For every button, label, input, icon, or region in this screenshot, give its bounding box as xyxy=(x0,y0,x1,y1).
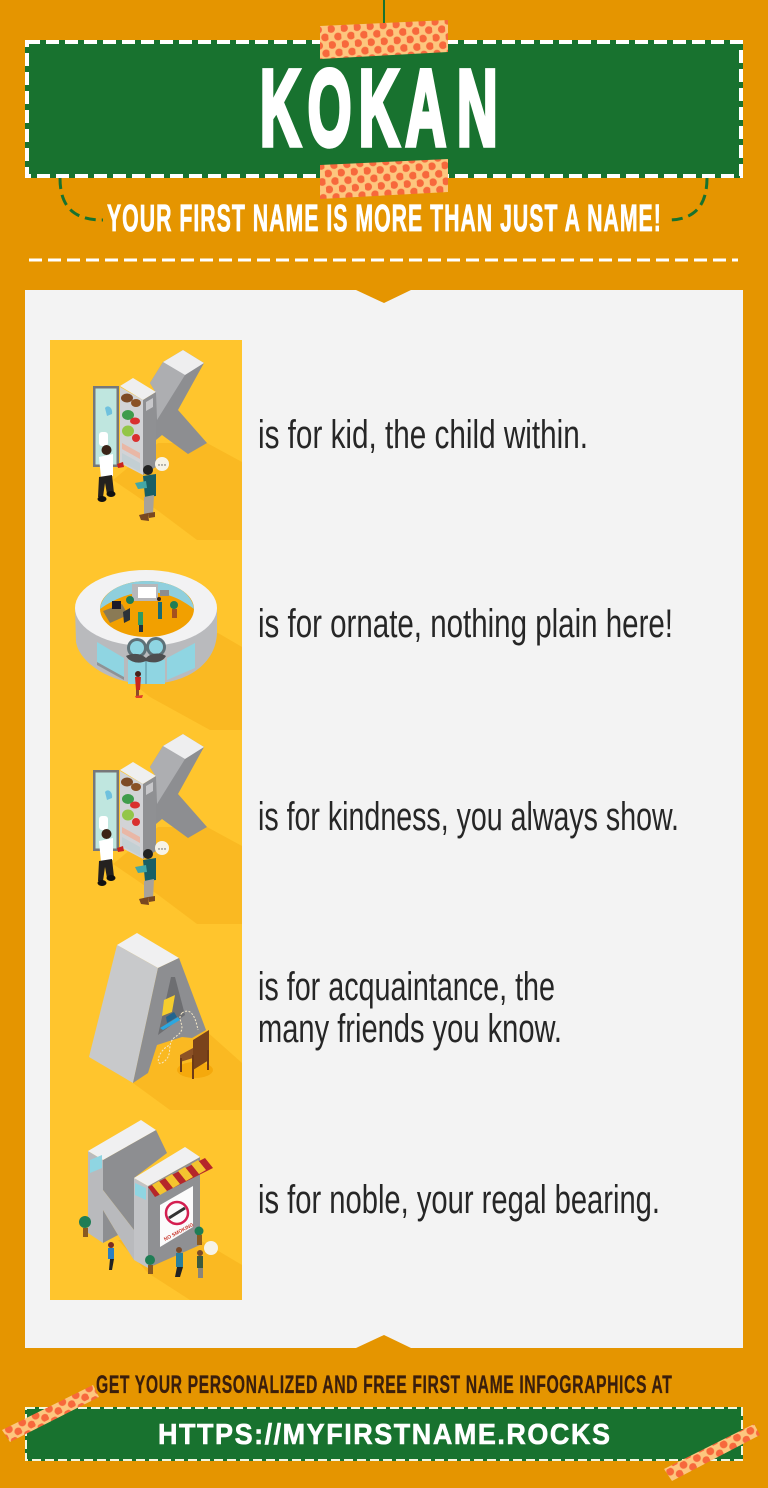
icon: letter N shop: NO SMOKING xyxy=(163,1222,195,1243)
footer banner xyxy=(25,1407,743,1461)
footer url: HTTPS://MYFIRSTNAME.ROCKS xyxy=(158,1418,610,1450)
icon: letter K fridge repeat xyxy=(93,734,242,924)
panel: content xyxy=(25,290,743,1348)
yellow strip xyxy=(50,340,242,1300)
connector left xyxy=(60,178,103,220)
subtitle: YOUR FIRST NAME IS MORE THAN JUST A NAME! xyxy=(107,196,661,240)
icon: letter A desk xyxy=(89,933,242,1110)
line: K: is for kid, the child within. xyxy=(258,413,588,457)
connector right xyxy=(668,178,707,220)
tape: footer right xyxy=(664,1424,760,1481)
icon: letter N shop xyxy=(79,1120,242,1300)
tape: footer left xyxy=(2,1385,99,1442)
tape: banner top xyxy=(320,20,448,59)
line: A second: many friends you know. xyxy=(258,1007,562,1051)
title: KOKAN xyxy=(260,48,498,169)
tape: banner bottom xyxy=(320,159,448,199)
icon: letter K fridge xyxy=(93,350,242,540)
title banner xyxy=(25,40,743,178)
line: A first: is for acquaintance, the xyxy=(258,965,555,1009)
dashed divider xyxy=(29,258,738,262)
icon: letter O optician xyxy=(75,570,242,730)
hanging string xyxy=(383,0,385,24)
footer tagline: GET YOUR PERSONALIZED AND FREE FIRST NAME INFOGRAPHICS AT xyxy=(96,1371,672,1399)
